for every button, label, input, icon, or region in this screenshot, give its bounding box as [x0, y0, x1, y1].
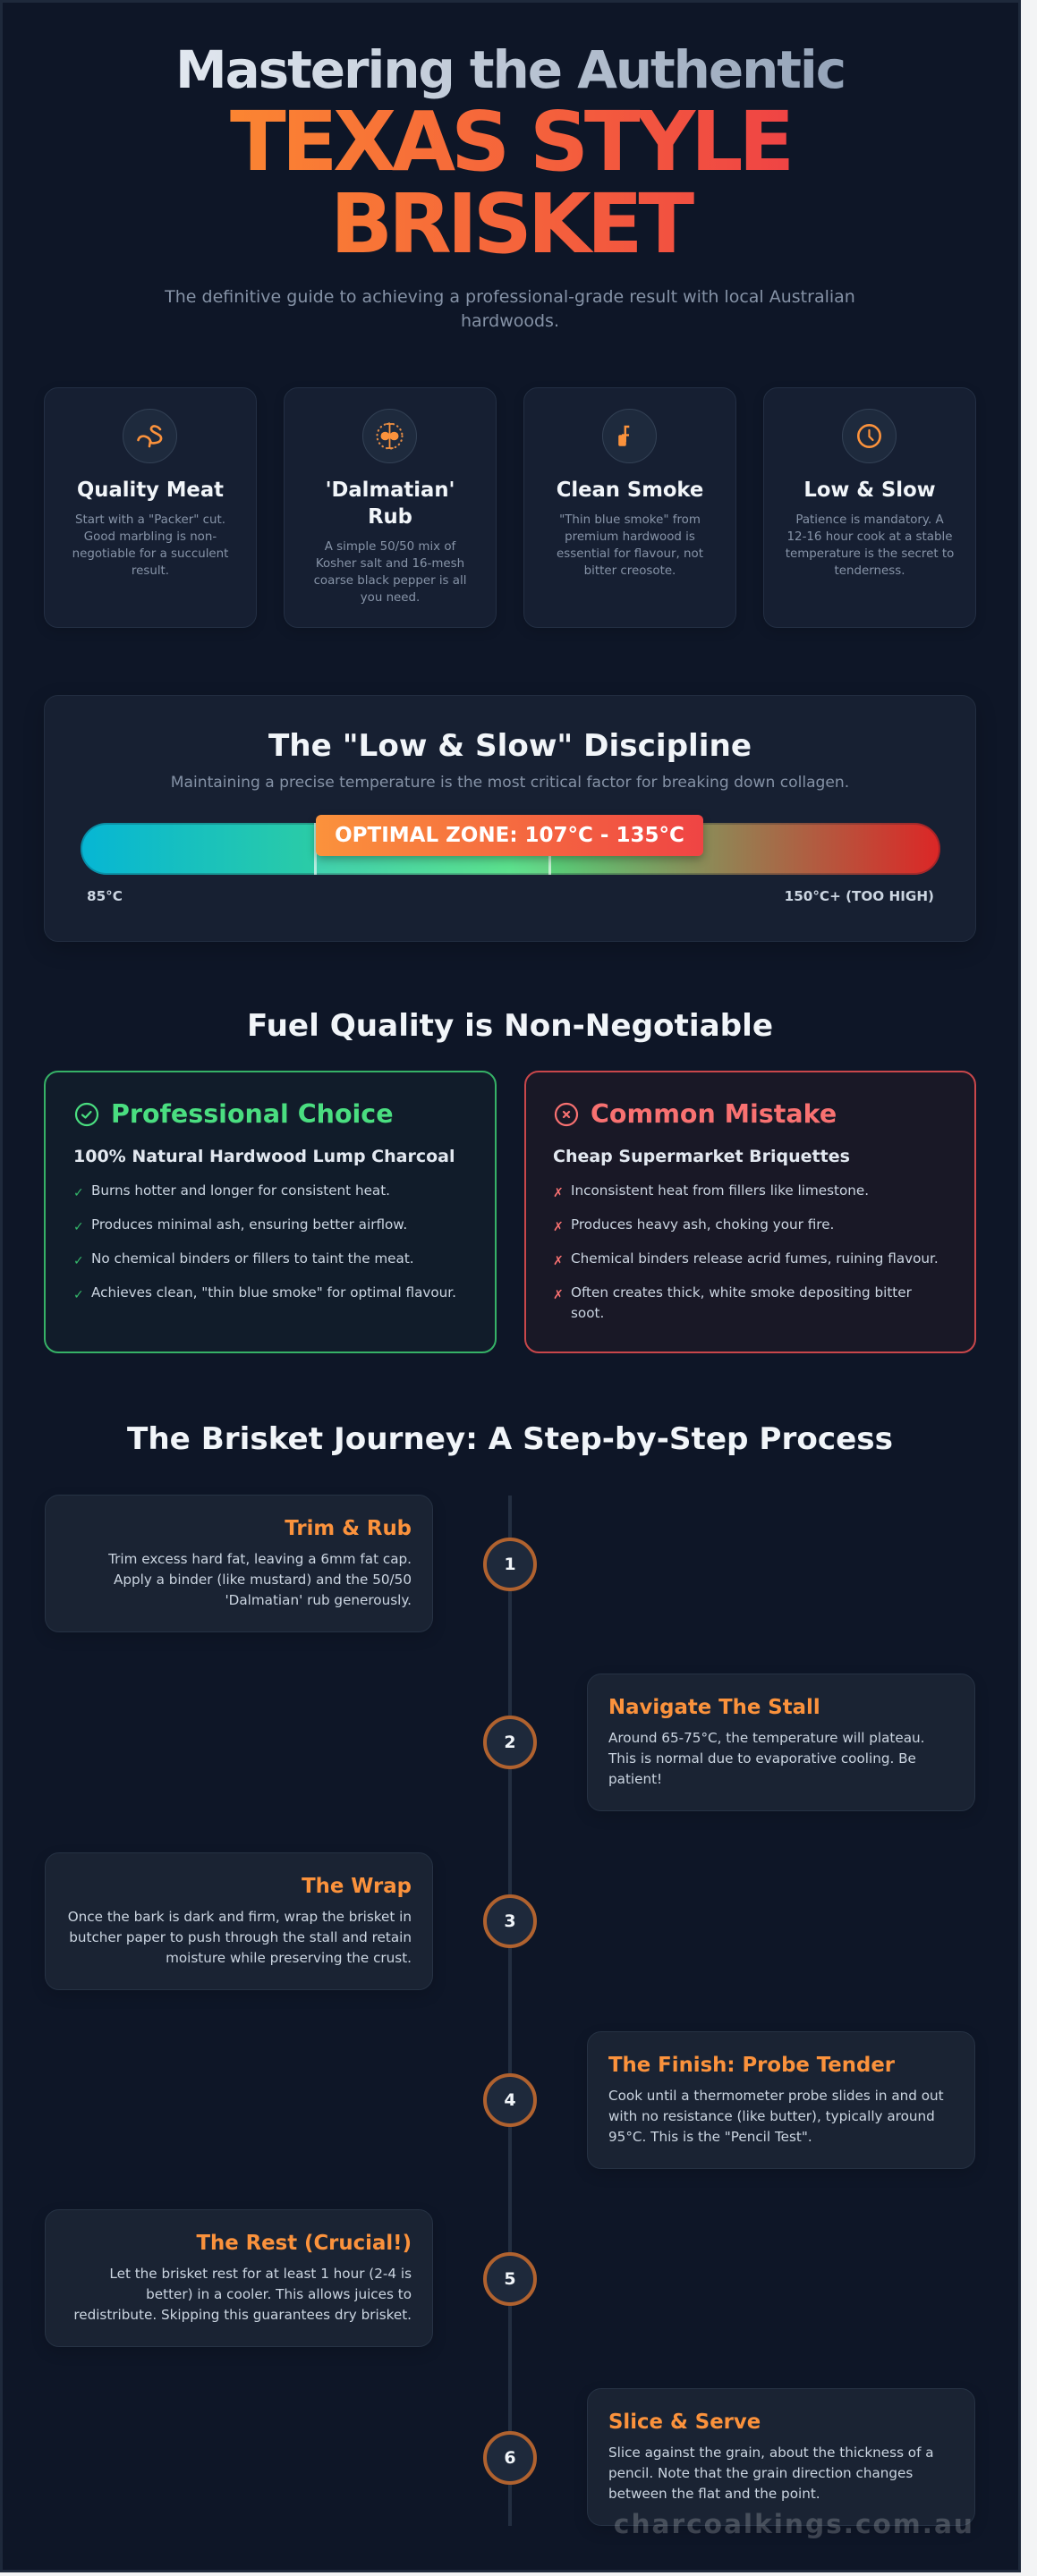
list: benefits: ✓	[73, 1186, 84, 1200]
heading: 'Dalmatian'	[326, 479, 455, 502]
heading: Quality Meat	[77, 479, 224, 502]
step text: with no resistance (like butter), typically around	[608, 2108, 935, 2124]
icon: smoke	[602, 409, 657, 463]
step 4 card	[587, 2031, 975, 2169]
body text: temperature is the secret to	[786, 547, 954, 561]
panel: professional choice	[44, 1071, 497, 1353]
body text: bitter creosote.	[584, 564, 676, 578]
heading: Common Mistake	[591, 1099, 837, 1129]
timeline line	[508, 1496, 512, 2526]
step text: Around 65-75°C, the temperature will plateau.	[608, 1730, 924, 1746]
panel: dalmatian rub	[284, 387, 497, 628]
panel: common mistake	[524, 1071, 976, 1353]
step text: butcher paper to push through the stall and retain	[69, 1929, 412, 1945]
step 3 number: 3	[504, 1911, 516, 1931]
step title: Slice & Serve	[608, 2411, 761, 2434]
step text	[608, 2445, 934, 2502]
step text: patient!	[608, 1771, 662, 1787]
list: problems: ✗	[553, 1220, 564, 1234]
watermark: charcoalkings.com.au	[614, 2509, 974, 2539]
step text: better) in a cooler. This allows juices to	[146, 2286, 412, 2302]
step text: Cook until a thermometer probe slides in and out	[608, 2088, 944, 2104]
title: Texas Style Brisket: BRISKET	[330, 176, 690, 272]
heading: The "Low & Slow" Discipline	[268, 728, 752, 764]
icon: cross circle	[555, 1102, 578, 1127]
body text: result.	[132, 564, 169, 578]
list: problems: ✗	[553, 1186, 564, 1200]
subheading: Cheap Supermarket Briquettes	[553, 1147, 850, 1166]
body text: 12-16 hour cook at a stable	[787, 530, 952, 544]
heading: Clean Smoke	[557, 479, 703, 502]
step text	[608, 2088, 944, 2145]
step text: Trim excess hard fat, leaving a 6mm fat cap.	[108, 1551, 412, 1567]
body text: Kosher salt and 16-mesh	[316, 557, 464, 571]
list: benefits	[73, 1182, 456, 1302]
body text: Start with a "Packer" cut.	[75, 513, 225, 527]
list: problems: ✗	[553, 1288, 564, 1302]
list: problems: Inconsistent heat from fillers like limestone.	[571, 1182, 869, 1199]
step 2 number: 2	[504, 1733, 516, 1752]
heading	[326, 479, 455, 529]
title: Mastering the Authentic: Mastering the Authentic	[175, 39, 845, 100]
icon: clock	[842, 409, 897, 463]
step 3 number	[483, 1894, 537, 1948]
step text	[608, 1730, 924, 1787]
optimal zone label	[316, 815, 703, 856]
step text: between the flat and the point.	[608, 2486, 820, 2502]
subtitle	[165, 287, 855, 331]
step 2 card	[587, 1674, 975, 1811]
optimal zone label: OPTIMAL ZONE: 107°C - 135°C	[335, 824, 684, 847]
step title: The Rest (Crucial!)	[196, 2232, 412, 2255]
list: problems: Chemical binders release acrid fumes, ruining flavour.	[571, 1250, 939, 1267]
icon: rub	[362, 409, 417, 463]
list: problems: Often creates thick, white smoke depositing bitter	[571, 1284, 912, 1301]
step 6 number	[483, 2431, 537, 2485]
step 4 number	[483, 2073, 537, 2127]
step title: The Finish: Probe Tender	[608, 2054, 895, 2077]
list: benefits: Burns hotter and longer for consistent heat.	[91, 1182, 390, 1199]
description: Maintaining a precise temperature is the most critical factor for breaking down collagen.	[171, 774, 849, 792]
panel: quality meat	[44, 387, 257, 628]
step 1 number	[483, 1538, 537, 1591]
step text: redistribute. Skipping this guarantees dry brisket.	[73, 2307, 412, 2323]
step 5 number: 5	[504, 2269, 516, 2289]
list: problems: Produces heavy ash, choking your fire.	[571, 1216, 834, 1233]
step title: Navigate The Stall	[608, 1696, 820, 1719]
step 1 number: 1	[504, 1555, 516, 1574]
step text: Once the bark is dark and firm, wrap the brisket in	[68, 1909, 412, 1925]
step 3 card	[45, 1852, 433, 1990]
step 6 card	[587, 2388, 975, 2526]
body text: tenderness.	[835, 564, 905, 578]
title: Texas Style Brisket: TEXAS STYLE	[230, 94, 790, 190]
subtitle: The definitive guide to achieving a professional-grade result with local Australian	[165, 287, 855, 307]
body text	[72, 513, 229, 578]
step text: Apply a binder (like mustard) and the 50/50	[114, 1572, 412, 1588]
icon: meat	[123, 409, 177, 463]
heading: Low & Slow	[803, 479, 936, 502]
list: benefits: ✓	[73, 1220, 84, 1234]
list: problems	[553, 1182, 939, 1321]
step text: Let the brisket rest for at least 1 hour (2-4 is	[109, 2266, 412, 2282]
step text: Slice against the grain, about the thickness of a	[608, 2445, 934, 2461]
body text: premium hardwood is	[565, 530, 695, 544]
subtitle: hardwoods.	[461, 311, 559, 331]
heading: Rub	[368, 505, 412, 529]
list: benefits: Produces minimal ash, ensuring better airflow.	[91, 1216, 407, 1233]
step text: pencil. Note that the grain direction changes	[608, 2465, 913, 2481]
step 4 number: 4	[504, 2090, 516, 2110]
list: problems: ✗	[553, 1254, 564, 1268]
step text: This is normal due to evaporative cooling. Be	[608, 1750, 916, 1767]
body text: negotiable for a succulent	[72, 547, 228, 561]
step 5 card	[45, 2209, 433, 2347]
body text	[557, 513, 703, 578]
scale label high: 150°C+ (TOO HIGH)	[785, 888, 934, 904]
step text: 95°C. This is the "Pencil Test".	[608, 2129, 812, 2145]
panel: clean smoke	[523, 387, 736, 628]
list: problems: soot.	[571, 1305, 604, 1321]
step text: moisture while preserving the crust.	[166, 1950, 412, 1966]
body text	[786, 513, 954, 578]
icon: check circle	[75, 1102, 98, 1127]
list: benefits: Achieves clean, "thin blue smoke" for optimal flavour.	[91, 1284, 456, 1301]
step 2 number	[483, 1716, 537, 1769]
step 1 card	[45, 1495, 433, 1632]
list: benefits: ✓	[73, 1288, 84, 1302]
heading: brisket journey: The Brisket Journey: A Step-by-Step Process	[127, 1421, 893, 1457]
step title: The Wrap	[302, 1875, 412, 1898]
temperature gauge bar	[81, 823, 940, 875]
body text: you need.	[361, 591, 420, 605]
step 5 number	[483, 2252, 537, 2306]
step title: Trim & Rub	[285, 1517, 412, 1540]
scale label low: 85°C	[87, 888, 123, 904]
body text: A simple 50/50 mix of	[325, 540, 455, 554]
list: benefits: No chemical binders or fillers to taint the meat.	[91, 1250, 414, 1267]
heading: fuel quality: Fuel Quality is Non-Negotiable	[247, 1008, 773, 1044]
title: Texas Style Brisket	[230, 94, 790, 272]
body text: "Thin blue smoke" from	[559, 513, 701, 527]
subheading: 100% Natural Hardwood Lump Charcoal	[73, 1147, 455, 1166]
step text	[108, 1551, 412, 1608]
step text: 'Dalmatian' rub generously.	[225, 1592, 412, 1608]
heading: Professional Choice	[111, 1099, 394, 1129]
body text: essential for flavour, not	[557, 547, 703, 561]
step text	[68, 1909, 412, 1966]
body text	[314, 540, 466, 605]
panel: temperature discipline	[44, 695, 976, 942]
list: benefits: ✓	[73, 1254, 84, 1268]
step text	[73, 2266, 412, 2323]
body text: Patience is mandatory. A	[795, 513, 944, 527]
panel: low and slow	[763, 387, 976, 628]
body text: Good marbling is non-	[84, 530, 217, 544]
body text: coarse black pepper is all	[314, 574, 466, 588]
step 6 number: 6	[504, 2448, 516, 2468]
